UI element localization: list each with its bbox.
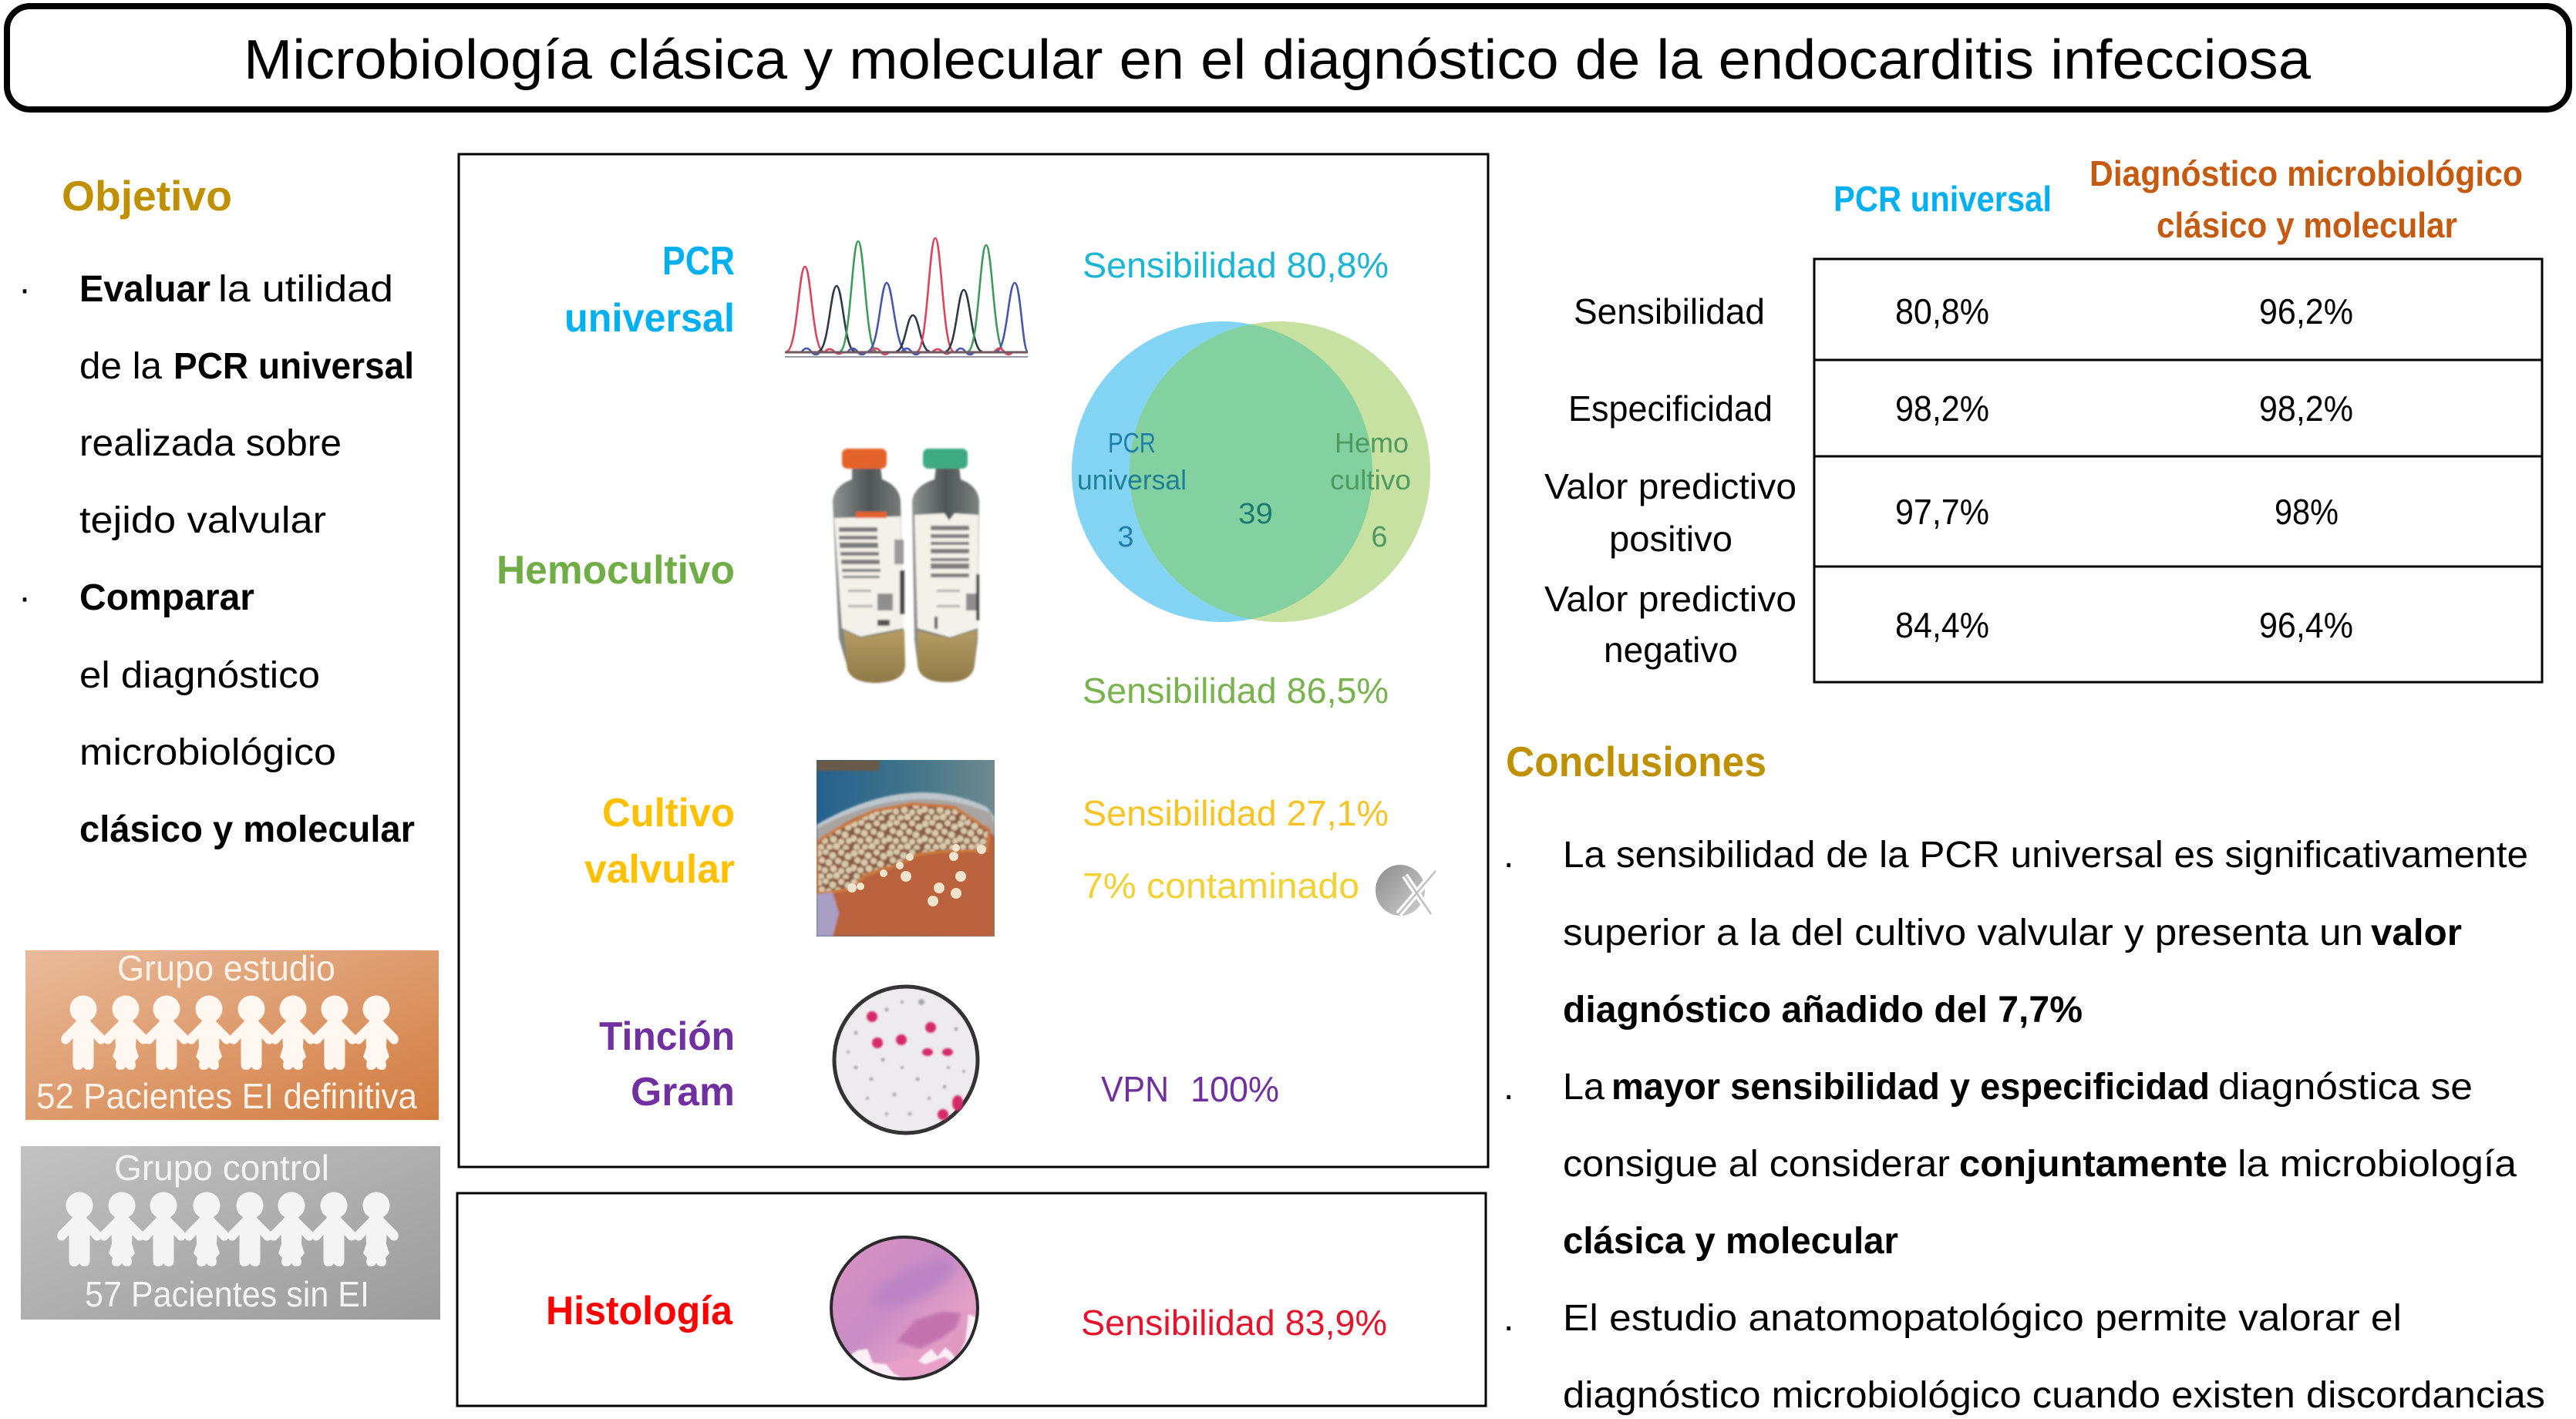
value: hemocultivo sensitivity: Sensibilidad 86,5%: [1083, 671, 1389, 711]
conclusion 2: [1504, 1067, 2517, 1262]
value: contamination: 7% contaminado: [1083, 866, 1359, 906]
label: histologia: Histología: [546, 1289, 733, 1333]
icon: contaminated plate: [1376, 865, 1436, 916]
label: PCR universal: universal: [564, 296, 735, 341]
photo: histology slide: [831, 1237, 978, 1387]
text block: objetivo bullets: microbiológico: [79, 732, 336, 773]
label: cultivo valvular: [584, 791, 735, 892]
label: tincion gram: Tinción: [599, 1014, 735, 1059]
text block: objetivo bullets: Comparar: [79, 577, 254, 618]
value: cultivo sensitivity: Sensibilidad 27,1%: [1083, 793, 1389, 833]
table values: 97,7%: [1895, 492, 1989, 532]
text block: objetivo bullets: clásico y molecular: [79, 809, 415, 850]
table values: 96,2%: [2259, 291, 2353, 331]
conclusion 2: la microbiología: [2238, 1144, 2517, 1185]
table values: 98,2%: [2259, 388, 2353, 429]
title text: Microbiología clásica y molecular en el diagnóstico de la endocarditis infecciosa: [244, 29, 2312, 91]
label: cultivo valvular: valvular: [584, 847, 735, 892]
conclusion 3: El estudio anatomopatológico permite valorar el: [1563, 1298, 2402, 1339]
conclusion 2: consigue al considerar: [1563, 1144, 1950, 1185]
value: VPN: VPN: [1101, 1069, 1169, 1109]
conclusion 3: [1504, 1298, 2545, 1416]
heading: conclusiones: Conclusiones: [1506, 738, 1766, 785]
label: 52 pacientes: 52 Pacientes EI definitiva: [36, 1076, 417, 1116]
label: PCR universal: PCR: [662, 239, 735, 284]
text block: objetivo bullets: Evaluar: [79, 269, 210, 310]
conclusion 1: valor: [2371, 913, 2462, 953]
text block: objetivo bullets: ·: [19, 269, 31, 310]
table values: 98,2%: [1895, 388, 1989, 429]
row labels: Valor predictivo: [1544, 579, 1796, 619]
conclusion 1: .: [1504, 835, 1514, 876]
label: 57 pacientes: 57 Pacientes sin EI: [85, 1274, 369, 1314]
text block: objetivo bullets: PCR universal: [173, 346, 414, 387]
heading: grupo control: Grupo control: [114, 1148, 329, 1188]
conclusion 3: diagnóstico microbiológico cuando existen discordancias: [1563, 1375, 2545, 1416]
photo: gram stain: [834, 987, 978, 1133]
row labels: negativo: [1604, 630, 1738, 670]
label: PCR universal: [564, 239, 735, 341]
panel: histologia: [457, 1193, 1486, 1406]
row labels: Sensibilidad: [1574, 291, 1765, 331]
conclusion 2: diagnóstica se: [2218, 1067, 2473, 1108]
value: histologia sensitivity: Sensibilidad 83,9%: [1081, 1303, 1387, 1343]
text block: objetivo bullets: ·: [19, 577, 31, 618]
table values: [1895, 291, 2353, 645]
row labels: positivo: [1609, 519, 1732, 559]
panel: objetivo: [19, 172, 415, 850]
table grid: [1814, 259, 2542, 682]
label: cultivo valvular: Cultivo: [602, 791, 735, 836]
conclusion 1: [1504, 835, 2528, 1031]
column header: diagnostico clasico y molecular: clásico y molecular: [2157, 205, 2457, 245]
table values: 84,4%: [1895, 605, 1989, 645]
text block: objetivo bullets: de la: [79, 346, 162, 387]
chart: venn diagram: [1072, 321, 1430, 622]
conclusion 2: mayor sensibilidad y especificidad: [1611, 1067, 2210, 1108]
text block: objetivo bullets: realizada sobre: [79, 423, 342, 464]
chart: venn diagram: PCR: [1108, 427, 1156, 459]
icon: row of people: [57, 1192, 399, 1266]
text block: objetivo bullets: la utilidad: [218, 269, 393, 310]
label: tincion gram: Gram: [631, 1070, 735, 1115]
title banner: [7, 6, 2569, 109]
chart: venn diagram: 39: [1238, 498, 1273, 530]
panel: conclusiones: [1504, 738, 2545, 1416]
chart: venn diagram: Hemo: [1335, 427, 1409, 459]
value: VPN: [1101, 1069, 1279, 1109]
panel: diagnostic methods: [459, 154, 1488, 1167]
chart: venn diagram: universal: [1077, 464, 1187, 496]
photo: blood culture bottles: [833, 449, 979, 683]
conclusion 1: diagnóstico añadido del 7,7%: [1563, 990, 2083, 1031]
conclusion 1: superior a la del cultivo valvular y presenta un: [1563, 913, 2363, 953]
row labels: Especificidad: [1568, 388, 1773, 429]
heading: objetivo: Objetivo: [62, 172, 232, 220]
chart: venn diagram: 3: [1117, 521, 1134, 553]
text block: objetivo bullets: el diagnóstico: [79, 655, 320, 696]
table values: 80,8%: [1895, 291, 1989, 331]
text block: objetivo bullets: [19, 269, 415, 850]
conclusion 2: conjuntamente: [1959, 1144, 2227, 1185]
panel: grupo estudio: [25, 948, 439, 1120]
conclusion 1: La sensibilidad de la PCR universal es significativamente: [1563, 835, 2528, 876]
label: tincion gram: [599, 1014, 735, 1115]
conclusion 2: clásica y molecular: [1563, 1221, 1898, 1262]
conclusion 3: .: [1504, 1298, 1514, 1339]
panel: results table: [1544, 153, 2542, 682]
table values: 96,4%: [2259, 605, 2353, 645]
row labels: [1544, 291, 1796, 670]
column header: diagnostico clasico y molecular: [2089, 153, 2523, 245]
chart: chromatogram: [785, 238, 1028, 357]
photo: culture plate: [817, 760, 995, 936]
text block: objetivo bullets: tejido valvular: [79, 500, 326, 541]
label: hemocultivo: Hemocultivo: [497, 548, 735, 593]
icon: row of people: [61, 996, 399, 1070]
value: PCR sensitivity: Sensibilidad 80,8%: [1083, 245, 1389, 285]
conclusion 2: .: [1504, 1067, 1514, 1108]
row labels: Valor predictivo: [1544, 466, 1796, 506]
heading: grupo estudio: Grupo estudio: [117, 948, 335, 988]
column header: diagnostico clasico y molecular: Diagnóstico microbiológico: [2089, 153, 2523, 193]
panel: grupo control: [21, 1146, 440, 1320]
chart: venn diagram: cultivo: [1330, 464, 1411, 496]
table values: 98%: [2275, 492, 2339, 532]
value: VPN: 100%: [1190, 1069, 1279, 1109]
conclusion 2: La: [1563, 1067, 1605, 1108]
column header: PCR universal: PCR universal: [1834, 179, 2052, 219]
chart: venn diagram: 6: [1371, 521, 1388, 553]
